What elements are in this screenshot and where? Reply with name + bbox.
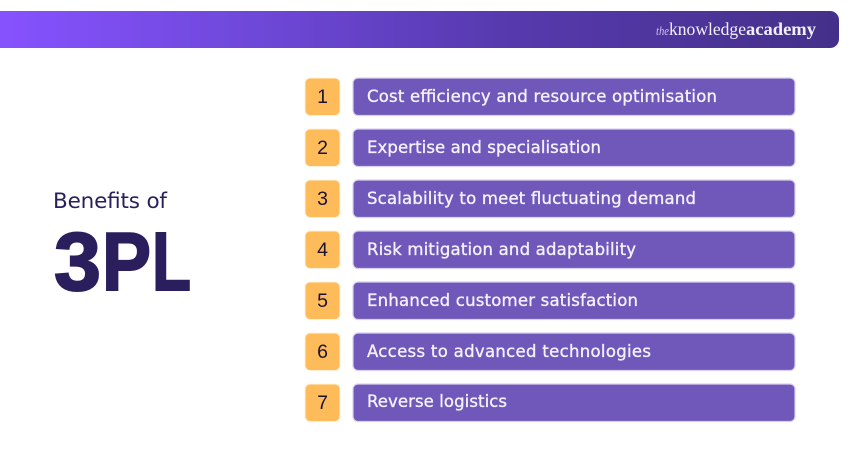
header bar: [0, 11, 839, 48]
list item 2: 2: [317, 137, 328, 159]
list item 2: Expertise and specialisation: [367, 138, 601, 157]
list item 3: Scalability to meet fluctuating demand: [367, 189, 696, 208]
list item 6: [305, 333, 795, 370]
heading: Benefits of: Benefits of: [53, 189, 167, 214]
logo: the knowledge academy: academy: [746, 19, 816, 39]
list item 6: Access to advanced technologies: [367, 342, 651, 361]
list item 7: 7: [317, 392, 328, 414]
list item 5: [305, 282, 795, 320]
list item 4: [305, 231, 795, 268]
list item 1: Cost efficiency and resource optimisation: [367, 87, 717, 106]
list item 3: [305, 180, 795, 218]
list item 5: 5: [317, 290, 328, 312]
list item 5: Enhanced customer satisfaction: [367, 291, 638, 310]
heading: 3PL: 3: [54, 215, 101, 308]
list item 1: [305, 78, 795, 116]
list item 4: Risk mitigation and adaptability: [367, 240, 636, 259]
logo: the knowledge academy: [656, 19, 816, 39]
logo: the knowledge academy: the: [656, 23, 669, 38]
list item 6: 6: [317, 341, 328, 363]
list item 4: 4: [317, 239, 328, 261]
heading: 3PL: L: [152, 215, 191, 308]
logo: the knowledge academy: knowledge: [669, 19, 746, 39]
list item 3: 3: [317, 188, 328, 210]
list item 7: [305, 384, 795, 422]
list item 1: 1: [317, 86, 328, 108]
heading: 3PL: P: [102, 215, 151, 308]
list item 2: [305, 129, 795, 166]
list item 7: Reverse logistics: [367, 392, 507, 411]
